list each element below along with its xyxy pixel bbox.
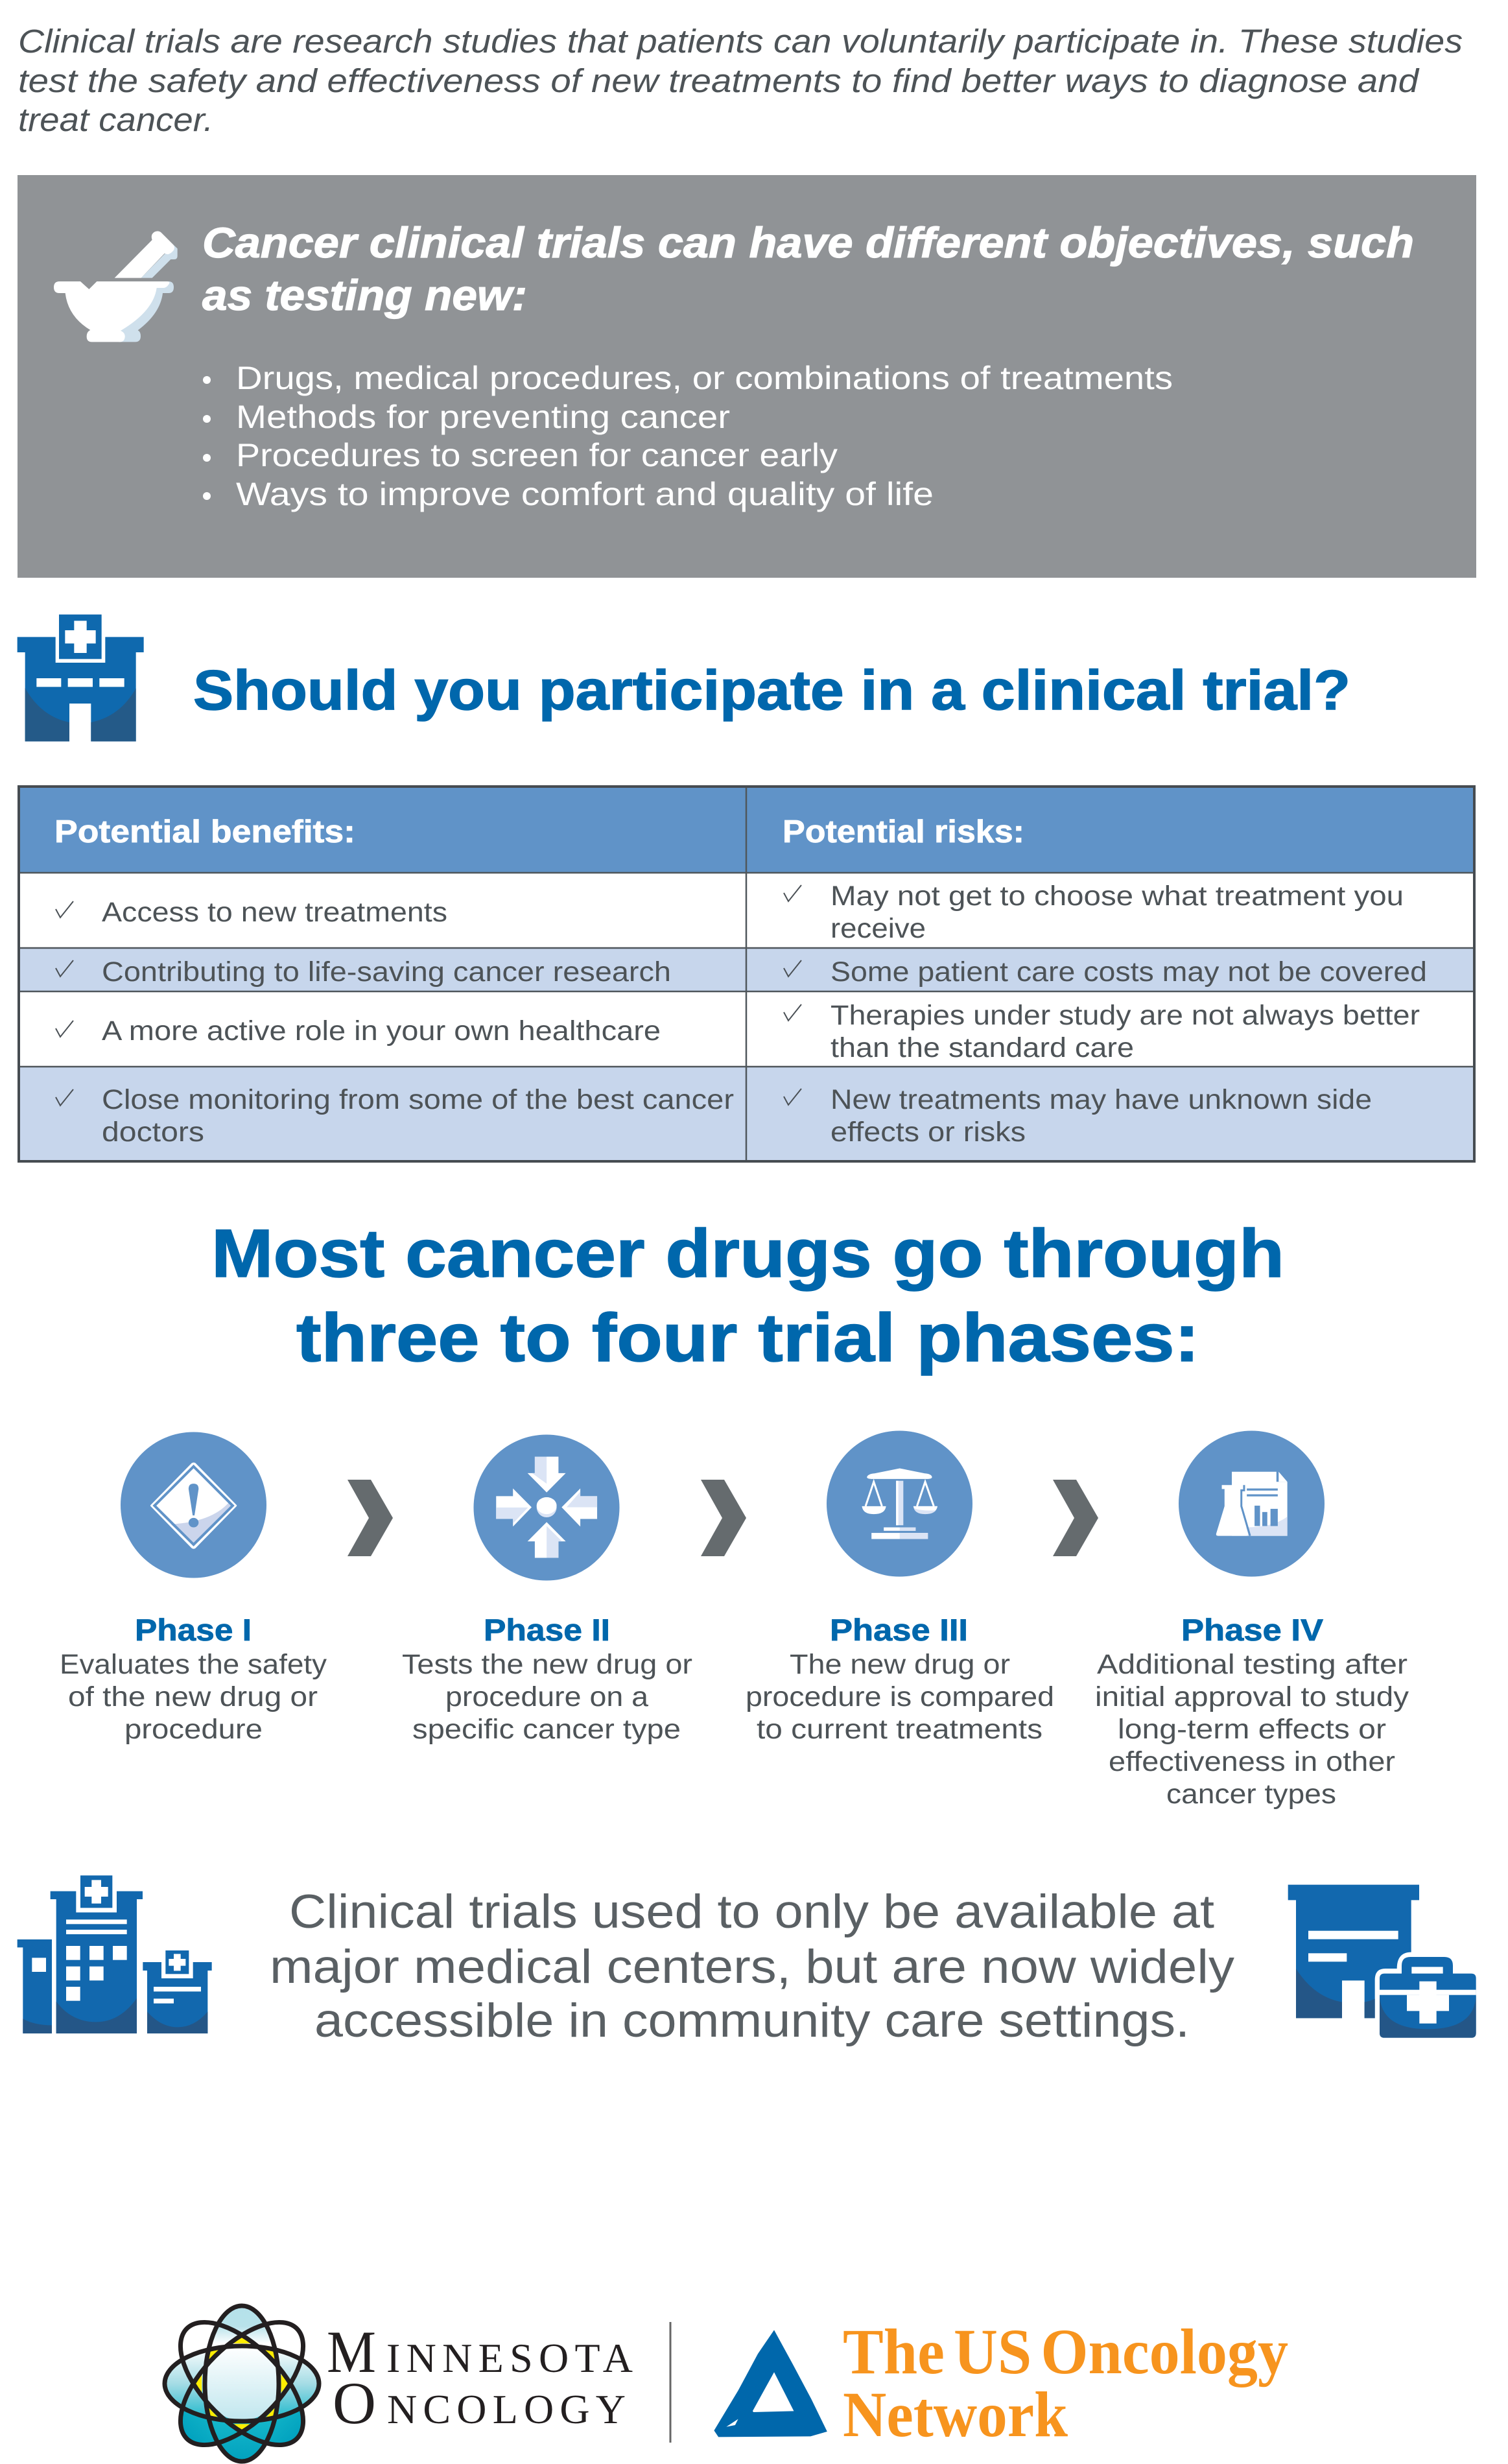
risk: therapies	[784, 1000, 1420, 1063]
icon: hospital campus	[18, 1875, 212, 2033]
phase I description: of the new drug or	[68, 1681, 318, 1712]
icon: mortar and pestle	[54, 231, 178, 342]
arrow: phase I to II	[348, 1480, 393, 1556]
phase IV description: Additional testing after	[1097, 1649, 1408, 1680]
risk: side effects: effects or risks	[831, 1117, 1026, 1148]
icon: balance scale	[827, 1430, 972, 1577]
panel: trial objectives	[18, 175, 1476, 578]
wordmark: Minnesota Oncology	[327, 2319, 633, 2436]
risk: therapies: Therapies under study are not always better	[831, 1000, 1420, 1031]
icon: warning diamond	[121, 1432, 266, 1578]
heading: trial phases: three to four trial phases:	[296, 1300, 1199, 1376]
panel heading: Cancer clinical trials can have different objectives, such	[202, 219, 1414, 267]
wordmark: The US Oncology Network: The US Oncology	[843, 2316, 1288, 2387]
risk: choice of treatment: receive	[831, 913, 926, 944]
objectives bullet list: Drugs, medical procedures, or combinations of treatments	[236, 360, 1173, 396]
benefit: research: Contributing to life-saving cancer research	[102, 956, 671, 988]
heading: trial phases	[211, 1216, 1284, 1376]
phase I title: Phase I	[135, 1613, 252, 1647]
benefit: close monitoring	[56, 1084, 734, 1148]
statement: community access: Clinical trials used to only be available at	[289, 1886, 1214, 1938]
phase IV	[1095, 1430, 1409, 1810]
logo: The US Oncology Network	[714, 2316, 1288, 2450]
phase III description	[746, 1649, 1054, 1745]
phase III description: procedure is compared	[746, 1681, 1054, 1712]
logo mark: atom	[159, 2301, 324, 2464]
wordmark: Minnesota Oncology: INNESOTA	[386, 2335, 633, 2381]
logo: Minnesota Oncology	[159, 2301, 633, 2464]
phase I description: Evaluates the safety	[60, 1649, 327, 1680]
risk: choice of treatment: May not get to choose what treatment you	[831, 881, 1404, 912]
logo divider	[669, 2322, 672, 2443]
phase II	[402, 1434, 692, 1745]
column header: benefits: Potential benefits:	[54, 814, 355, 849]
phase IV description	[1095, 1649, 1409, 1810]
arrow: phase III to IV	[1053, 1480, 1098, 1556]
table: benefits and risks	[19, 787, 1474, 1161]
icon: converging arrows	[473, 1434, 620, 1581]
benefit: active role: A more active role in your own healthcare	[102, 1015, 661, 1047]
statement: community access: major medical centers, but are now widely	[270, 1941, 1235, 1993]
icon: clinic and medical bag	[1288, 1885, 1476, 2038]
phase IV description: long-term effects or	[1118, 1714, 1386, 1745]
icon: flask and report	[1179, 1430, 1325, 1577]
phase II description: specific cancer type	[412, 1714, 681, 1745]
wordmark: Minnesota Oncology: M	[327, 2319, 376, 2385]
phase II description	[402, 1649, 692, 1745]
phase I description	[60, 1649, 327, 1745]
phase IV description: initial approval to study	[1095, 1681, 1409, 1712]
logo mark: triangle	[714, 2330, 827, 2437]
objectives bullet list: Ways to improve comfort and quality of life	[236, 476, 934, 512]
risk: therapies: than the standard care	[831, 1032, 1134, 1063]
phase IV title: Phase IV	[1181, 1613, 1324, 1647]
intro text	[18, 23, 1463, 138]
phase I description: procedure	[124, 1714, 263, 1745]
objectives bullet list: Procedures to screen for cancer early	[236, 437, 838, 473]
benefit: access: Access to new treatments	[102, 897, 447, 928]
statement: community access: accessible in community care settings.	[314, 1995, 1190, 2047]
column header: risks: Potential risks:	[783, 814, 1024, 849]
heading: trial phases: Most cancer drugs go through	[211, 1216, 1284, 1292]
wordmark: Minnesota Oncology: O	[333, 2370, 376, 2436]
phase II description: Tests the new drug or	[402, 1649, 692, 1680]
risk: care costs: Some patient care costs may not be covered	[831, 956, 1427, 988]
phase IV description: effectiveness in other	[1109, 1746, 1395, 1777]
intro text: treat cancer.	[18, 101, 213, 138]
wordmark: Minnesota Oncology: NCOLOGY	[387, 2386, 626, 2432]
phase I	[60, 1432, 327, 1745]
panel heading	[202, 219, 1414, 319]
wordmark: The US Oncology Network	[843, 2316, 1288, 2450]
risk: side effects	[784, 1084, 1372, 1148]
benefit: close monitoring: Close monitoring from some of the best cancer	[102, 1084, 734, 1115]
phase III description: to current treatments	[757, 1714, 1043, 1745]
risk: side effects: New treatments may have unknown side	[831, 1084, 1372, 1115]
objectives bullet list: Methods for preventing cancer	[236, 399, 730, 435]
phase IV description: cancer types	[1166, 1779, 1336, 1810]
statement: community access	[270, 1886, 1235, 2047]
phase III description: The new drug or	[790, 1649, 1010, 1680]
icon: hospital	[18, 615, 144, 741]
arrow: phase II to III	[701, 1480, 746, 1556]
objectives bullet list	[203, 360, 1173, 512]
phase III	[746, 1430, 1054, 1745]
risk: choice of treatment	[784, 881, 1404, 944]
wordmark: The US Oncology Network: Network	[843, 2378, 1068, 2450]
panel heading: as testing new:	[202, 271, 527, 319]
intro text: test the safety and effectiveness of new treatments to find better ways to diagnose and	[18, 62, 1420, 99]
intro text: Clinical trials are research studies that patients can voluntarily participate in. These studies	[18, 23, 1463, 60]
phase III title: Phase III	[830, 1613, 968, 1647]
phase II title: Phase II	[484, 1613, 610, 1647]
heading: should you participate: Should you participate in a clinical trial?	[193, 659, 1350, 722]
phase II description: procedure on a	[445, 1681, 648, 1712]
benefit: close monitoring: doctors	[102, 1117, 204, 1148]
